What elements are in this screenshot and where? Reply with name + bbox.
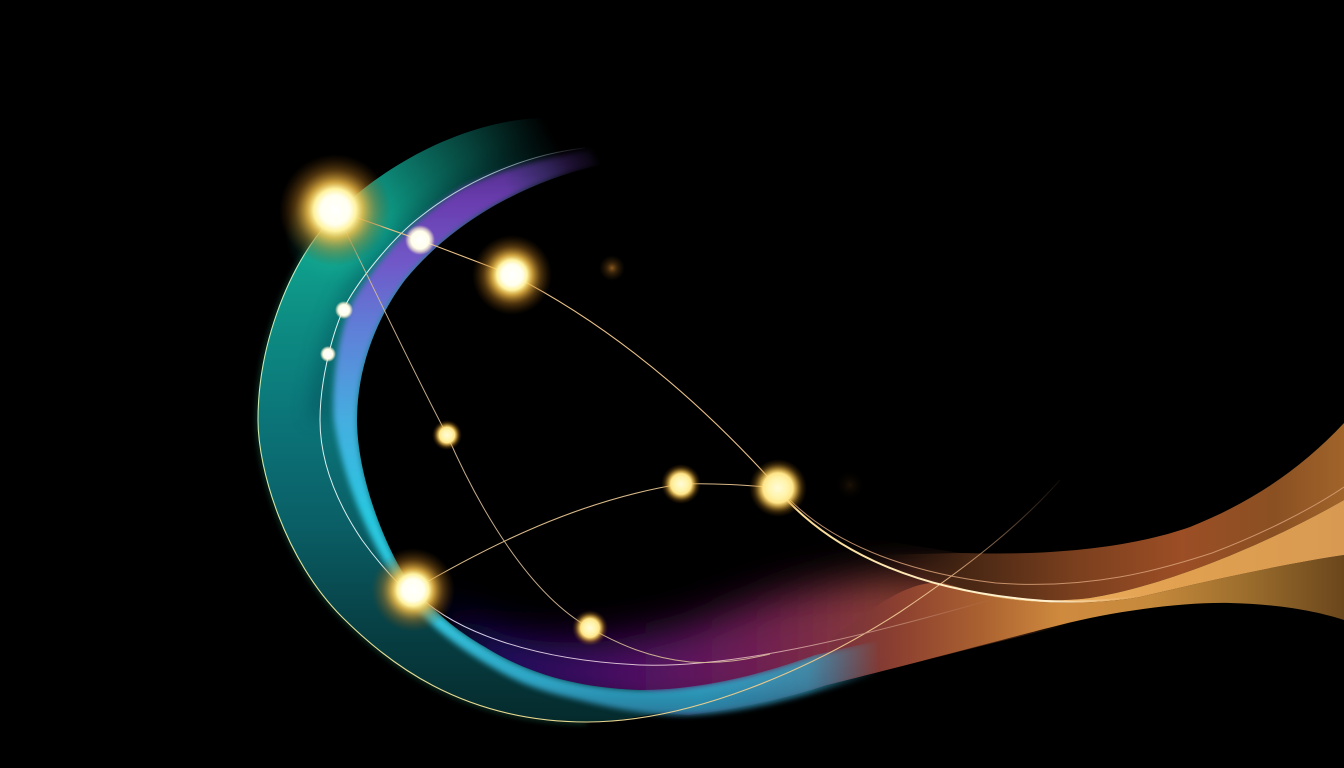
- node: gold upper: [472, 235, 552, 315]
- orange ribbon: [827, 423, 1344, 685]
- inner white arc: [320, 148, 585, 585]
- node: faint spark: [599, 255, 625, 281]
- line joining lower node to right nodes: [413, 484, 778, 590]
- purple glow under the arc: [430, 570, 1040, 720]
- node: small on arc: [335, 301, 353, 319]
- lower purple line: [413, 590, 990, 665]
- ribbon: light gold band: [950, 500, 1344, 603]
- node: lower centre: [572, 610, 608, 646]
- crescent inner shading: [306, 156, 512, 422]
- node: large top left: [279, 154, 391, 266]
- ribbon: lower orange section: [827, 555, 1344, 685]
- node: faint right spark: [836, 471, 864, 499]
- ribbon: upper brown section: [880, 423, 1344, 600]
- thin lines: [258, 148, 1344, 722]
- blue to purple inner band: [334, 150, 880, 715]
- line from top node through bright nodes: [335, 210, 778, 488]
- line from top node through lower nodes: [335, 210, 770, 663]
- bright curve into ribbon: [787, 500, 1140, 602]
- node: right gold: [749, 459, 807, 517]
- glowing nodes: [279, 154, 864, 646]
- teal crescent: [258, 118, 690, 722]
- outer arc rising to the right: [587, 480, 1060, 722]
- outer yellow arc: [258, 220, 587, 722]
- outer edge glow: [258, 220, 587, 722]
- node: lower left bright: [371, 548, 455, 632]
- thin line through ribbon: [790, 487, 1344, 584]
- node: white on band: [405, 225, 435, 255]
- node: centre right: [661, 464, 701, 504]
- green bloom beside top node: [285, 185, 385, 285]
- node: small lower on arc: [320, 346, 336, 362]
- node: centre left: [432, 420, 462, 450]
